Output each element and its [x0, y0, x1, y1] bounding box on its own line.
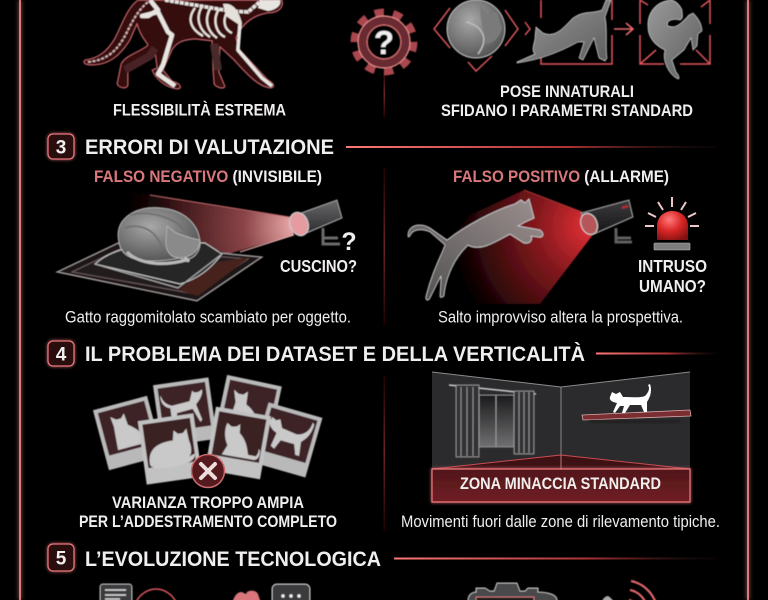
text: varianza: [79, 493, 337, 531]
section 5 heading: 5: [56, 548, 67, 570]
icon: gear with question mark: [354, 12, 414, 72]
section 4 heading: IL PROBLEMA DEI DATASET E DELLA VERTICALITÀ: [85, 341, 585, 366]
divider top: [384, 70, 385, 118]
icon: contorted cat in box: [640, 0, 710, 79]
label: intruso umano: [638, 256, 707, 296]
photo 5: [205, 407, 271, 479]
icon: question mark: ?: [341, 228, 357, 256]
threat zone: ZONA MINACCIA STANDARD: [460, 474, 661, 493]
label: intruso umano: UMANO?: [639, 276, 706, 296]
shelf: [582, 410, 691, 423]
window: [449, 385, 536, 457]
photo 2: [153, 377, 217, 447]
section 3 heading: ERRORI DI VALUTAZIONE: [85, 135, 334, 159]
label: intruso umano: INTRUSO: [638, 256, 707, 276]
icon: x badge: [192, 454, 224, 488]
icon: siren: [645, 197, 699, 250]
text: pose innaturali: [441, 82, 693, 120]
illustration: false negative beam and cat on pillow: [57, 192, 294, 301]
icon: document with arc: [100, 584, 176, 600]
arrow: [614, 23, 633, 35]
subheading: falso negativo: FALSO NEGATIVO (INVISIBILE): [94, 167, 322, 186]
divider section 4: [384, 375, 385, 531]
section 5 heading: [48, 544, 717, 571]
label: flessibilita: FLESSIBILITÀ ESTREMA: [113, 100, 286, 120]
threat zone: [432, 455, 690, 502]
icon: hand with chat bubble: [232, 584, 310, 600]
white cat: [610, 384, 651, 413]
text: varianza: VARIANZA TROPPO AMPIA: [112, 493, 304, 512]
photo 4: [138, 413, 202, 485]
section 3 heading: [48, 134, 717, 159]
icon: round cat in diamond: [434, 0, 530, 71]
caption: gatto: Gatto raggomitolato scambiato per oggetto.: [65, 308, 351, 326]
illustration: room: [432, 372, 691, 502]
icon: camera: [468, 583, 557, 600]
photo stack: [93, 375, 322, 485]
text: pose innaturali: POSE INNATURALI: [500, 82, 634, 101]
icon: stretching cat in box: [517, 0, 612, 64]
photo 1: [93, 396, 163, 470]
icon: camera right: [577, 200, 633, 242]
caption: movimenti: Movimenti fuori dalle zone di rilevamento tipiche.: [401, 513, 720, 531]
photo 6: [252, 402, 322, 478]
illustration: cat skeleton: [84, 0, 282, 89]
icon: camera left: [286, 200, 342, 244]
section 5 heading: L’EVOLUZIONE TECNOLOGICA: [85, 547, 381, 571]
text: pose innaturali: SFIDANO I PARAMETRI STANDARD: [441, 101, 693, 120]
photo 3: [214, 375, 282, 447]
section 4 heading: 4: [56, 344, 67, 366]
caption: salto: Salto improvviso altera la prospettiva.: [438, 308, 683, 326]
subheading: falso positivo: FALSO POSITIVO (ALLARME): [453, 167, 669, 186]
label: cuscino: CUSCINO?: [280, 256, 357, 276]
section 3 heading: 3: [56, 138, 66, 158]
icon: wifi signal: [600, 581, 658, 600]
divider section 3: [384, 168, 385, 326]
icon: gear with question mark: ?: [374, 24, 394, 61]
illustration: jumping cat and red beam: [408, 190, 592, 304]
text: varianza: PER L’ADDESTRAMENTO COMPLETO: [79, 512, 337, 531]
